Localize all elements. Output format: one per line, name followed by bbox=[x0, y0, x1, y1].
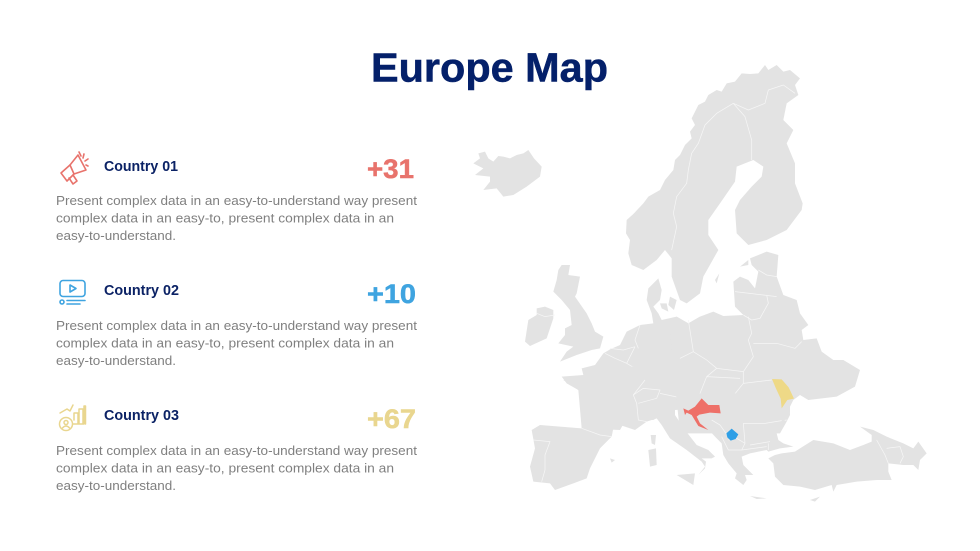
text block: complex data in an easy-to, present complex data in an bbox=[56, 460, 394, 476]
icon: megaphone bbox=[61, 152, 88, 184]
number: +31 bbox=[367, 154, 414, 184]
map: Norway, Sweden and Finland bbox=[626, 65, 803, 303]
heading: Country 02 bbox=[104, 283, 179, 299]
text block: Present complex data in an easy-to-understand way present bbox=[56, 193, 417, 208]
text block bbox=[56, 193, 417, 243]
heading: Country 03 bbox=[104, 408, 179, 424]
icon: growth chart with person bbox=[60, 405, 86, 430]
map of Europe bbox=[473, 65, 927, 502]
panel: country 02 bbox=[56, 279, 417, 368]
map: Balkans, Greece, Turkey, Caucasus and islands bbox=[700, 393, 927, 502]
number: +67 bbox=[367, 404, 416, 434]
panel: country 03 bbox=[56, 404, 417, 493]
text block: easy-to-understand. bbox=[56, 478, 176, 493]
text block: easy-to-understand. bbox=[56, 228, 176, 243]
map: Iceland bbox=[473, 150, 542, 197]
map: Iberia, France, Italy and islands bbox=[530, 367, 720, 490]
text block bbox=[56, 318, 417, 368]
icon: video screen bbox=[60, 280, 85, 304]
panel: country 01 bbox=[56, 152, 417, 243]
map: Ireland and Britain, Denmark, western Europe bbox=[525, 265, 700, 420]
text block bbox=[56, 443, 417, 493]
number: +10 bbox=[367, 279, 416, 309]
text block: complex data in an easy-to, present complex data in an bbox=[56, 210, 394, 226]
highlighted country: Croatia bbox=[683, 398, 721, 430]
title: Europe Map bbox=[371, 44, 608, 90]
highlighted country: Moldova bbox=[772, 379, 794, 408]
text block: Present complex data in an easy-to-understand way present bbox=[56, 443, 417, 458]
text block: complex data in an easy-to, present complex data in an bbox=[56, 336, 394, 350]
highlighted country: Kosovo bbox=[726, 429, 738, 441]
text block: Present complex data in an easy-to-understand way present bbox=[56, 318, 417, 333]
map: Baltics, Poland, Belarus, Ukraine, Romania bbox=[670, 252, 860, 433]
text block: easy-to-understand. bbox=[56, 353, 176, 368]
heading: Country 01 bbox=[104, 159, 178, 175]
